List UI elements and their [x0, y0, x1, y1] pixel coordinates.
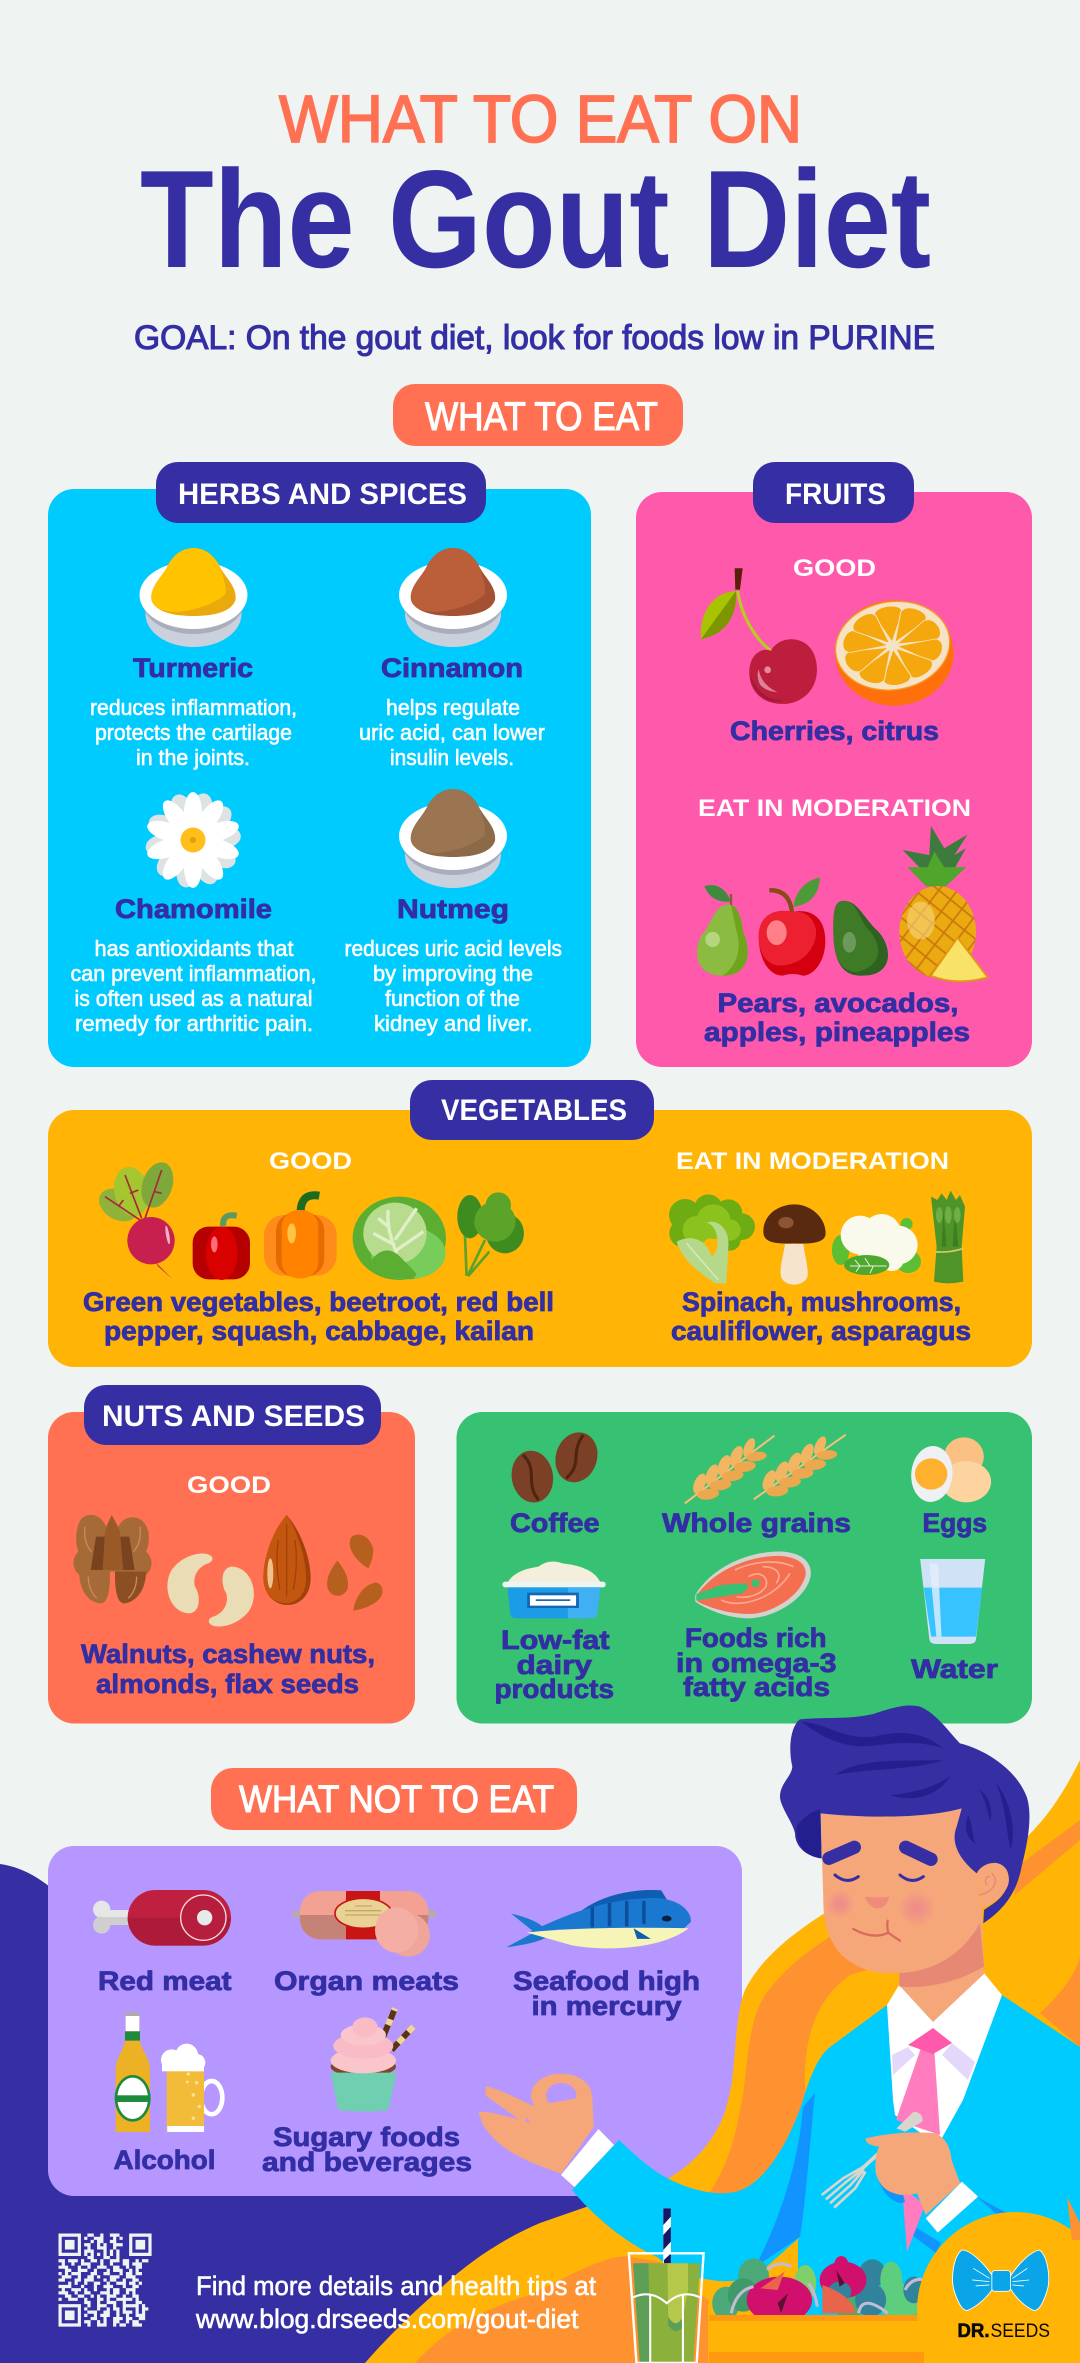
- icon: kailan: [457, 1192, 524, 1276]
- icon: fish: [506, 1890, 691, 1948]
- icon: turmeric bowl: [140, 548, 248, 647]
- icon: salad: [712, 2256, 922, 2315]
- label: organ meats: Organ meats: [274, 1966, 459, 1996]
- icon: chamomile flower: [144, 791, 242, 889]
- subheading: eat in moderation: EAT IN MODERATION: [698, 795, 971, 822]
- heading: what not to eat: WHAT NOT TO EAT: [239, 1779, 554, 1821]
- text: chamomile description: has antioxidants that: [94, 936, 294, 961]
- heading: what to eat: WHAT TO EAT: [425, 395, 658, 439]
- man: tie: [896, 2028, 952, 2252]
- label: foods rich in omega-3: Foods rich: [685, 1623, 826, 1653]
- label: seafood high in mercury: Seafood high: [513, 1966, 700, 1996]
- qr code: [58, 2235, 150, 2325]
- text: nutmeg description: kidney and liver.: [374, 1011, 532, 1036]
- label: seafood high in mercury: in mercury: [532, 1991, 682, 2021]
- man: collar shadow: [892, 2043, 975, 2080]
- heading: what to eat: [393, 384, 683, 446]
- title: [140, 82, 931, 297]
- icon: spinach: [669, 1194, 755, 1283]
- label: turmeric: Turmeric: [133, 653, 253, 683]
- panel: other foods: [456, 1412, 1032, 1724]
- icon: cashew nuts: [167, 1553, 254, 1627]
- icon: salmon steak: [695, 1552, 811, 1618]
- icon: green juice glass: [629, 2208, 704, 2363]
- man: fork and right hand: [822, 2112, 978, 2233]
- panel: what not to eat: [48, 1846, 742, 2196]
- label: water: Water: [911, 1654, 999, 1684]
- heading: nuts and seeds: NUTS AND SEEDS: [102, 1400, 365, 1433]
- label: foods rich in omega-3: fatty acids: [683, 1672, 830, 1702]
- footer text: www.blog.drseeds.com/gout-diet: [195, 2304, 579, 2334]
- text: nutmeg description: reduces uric acid levels: [344, 936, 562, 961]
- icon: cinnamon bowl: [399, 548, 507, 647]
- icon: red meat: [93, 1890, 231, 1946]
- icon: glass of water: [920, 1559, 985, 1644]
- icon: red bell pepper: [193, 1215, 250, 1280]
- label: coffee: Coffee: [510, 1508, 600, 1538]
- logo wordmark: SEEDS: [990, 2321, 1050, 2342]
- label: whole grains: Whole grains: [662, 1508, 851, 1538]
- subheading: vegetables in moderation: EAT IN MODERATION: [676, 1148, 949, 1175]
- icon: beetroot: [93, 1158, 179, 1279]
- icon: pineapple: [899, 826, 988, 981]
- heading: vegetables: VEGETABLES: [441, 1094, 627, 1127]
- man: suit: [572, 1995, 1080, 2320]
- icon: cauliflower: [832, 1214, 921, 1275]
- heading: what not to eat: [211, 1768, 577, 1830]
- background: orange blob bottom: [415, 2256, 708, 2363]
- footer text: Find more details and health tips at: [196, 2271, 596, 2301]
- label: chamomile: Chamomile: [115, 894, 272, 924]
- icon: asparagus: [931, 1191, 965, 1283]
- label: nuts list: almonds, flax seeds: [96, 1669, 359, 1699]
- label: sugary foods and beverages: Sugary foods: [273, 2122, 460, 2152]
- icon: eggs: [909, 1437, 991, 1504]
- man: left cuff: [561, 2129, 614, 2187]
- subheading: good vegetables: GOOD: [269, 1148, 352, 1175]
- title: The Gout Diet: [140, 142, 931, 297]
- label: low-fat dairy products: [494, 1625, 614, 1704]
- icon: citrus: [830, 594, 955, 706]
- subheading: good nuts: GOOD: [187, 1472, 271, 1499]
- text: cinnamon description: [359, 695, 545, 770]
- footer text: [195, 2271, 596, 2334]
- brand logo: dr seeds: [917, 2197, 1080, 2363]
- label: pears, avocados, apples, pineapples: Pears, avocados,: [718, 988, 958, 1018]
- text: turmeric description: protects the cartilage: [95, 720, 292, 745]
- goal statement: GOAL: On the gout diet, look for foods low in PURINE: [134, 319, 935, 357]
- icon: cherry: [701, 568, 817, 704]
- label: sugary foods and beverages: [262, 2122, 472, 2177]
- logo wordmark: DR.: [958, 2321, 990, 2342]
- background: navy corner shape: [0, 1864, 620, 2363]
- label: nuts list: [81, 1639, 375, 1699]
- label: pears, avocados, apples, pineapples: apples, pineapples: [704, 1017, 970, 1047]
- icon: nutmeg bowl: [399, 789, 507, 888]
- label: cherries, citrus: Cherries, citrus: [730, 716, 939, 746]
- label: nuts list: Walnuts, cashew nuts,: [81, 1639, 375, 1669]
- label: low-fat dairy products: dairy: [516, 1650, 592, 1680]
- icon: organ meats: [293, 1891, 436, 1957]
- icon: whole grains: [674, 1421, 856, 1516]
- heading: fruits: [753, 462, 914, 523]
- icon: cabbage: [353, 1197, 446, 1280]
- label: good vegetables list: [83, 1287, 554, 1346]
- label: moderation vegetables list: cauliflower, asparagus: [671, 1316, 971, 1346]
- icon: almond: [263, 1515, 311, 1605]
- text: chamomile description: remedy for arthritic pain.: [75, 1011, 313, 1036]
- icon: blue bow tie: [953, 2250, 1049, 2311]
- icon: low-fat dairy tub: [502, 1561, 606, 1618]
- icon: squash: [264, 1195, 337, 1278]
- text: nutmeg description: [344, 936, 562, 1036]
- man: shirt: [887, 1973, 1002, 2145]
- label: cinnamon: Cinnamon: [381, 653, 523, 683]
- icon: avocado: [833, 901, 888, 976]
- icon: beer bottle and mug: [116, 2013, 222, 2132]
- heading: fruits: FRUITS: [785, 478, 886, 511]
- label: eggs: Eggs: [922, 1508, 987, 1538]
- panel: herbs and spices: [48, 462, 591, 1067]
- text: cinnamon description: helps regulate: [386, 695, 520, 720]
- icon: apple: [759, 878, 825, 976]
- label: low-fat dairy products: products: [494, 1674, 614, 1704]
- text: chamomile description: is often used as a natural: [74, 986, 312, 1011]
- background: orange wave: [705, 1920, 900, 2200]
- label: red meat: Red meat: [98, 1966, 232, 1996]
- text: cinnamon description: insulin levels.: [390, 745, 514, 770]
- text: turmeric description: [90, 695, 297, 770]
- subheading: good: GOOD: [793, 555, 876, 582]
- label: foods rich in omega-3: in omega-3: [676, 1648, 836, 1678]
- label: low-fat dairy products: Low-fat: [501, 1625, 610, 1655]
- label: seafood high in mercury: [513, 1966, 700, 2021]
- label: nutmeg: Nutmeg: [397, 894, 509, 924]
- logo wordmark: [958, 2321, 1050, 2342]
- heading: nuts and seeds: [84, 1385, 381, 1445]
- panel: vegetables: [48, 1080, 1032, 1367]
- icon: flax seeds: [327, 1535, 383, 1611]
- text: chamomile description: can prevent inflammation,: [70, 961, 316, 986]
- label: pears, avocados, apples, pineapples: [704, 988, 970, 1047]
- label: moderation vegetables list: [671, 1287, 971, 1346]
- label: good vegetables list: pepper, squash, cabbage, kailan: [104, 1316, 534, 1346]
- panel: fruits: [636, 462, 1032, 1067]
- man: left hand ok gesture: [479, 2078, 594, 2174]
- heading: vegetables: [410, 1080, 654, 1140]
- background: yellow wave: [365, 1760, 1080, 2363]
- heading: herbs and spices: [156, 462, 486, 523]
- background: orange band right: [1015, 1820, 1080, 1895]
- icon: walnut: [73, 1515, 152, 1603]
- table: yellow tray: [709, 2315, 924, 2363]
- text: chamomile description: [70, 936, 316, 1036]
- panel: nuts and seeds: [48, 1385, 415, 1724]
- title: WHAT TO EAT ON: [279, 82, 802, 157]
- man: head and hair: [780, 1705, 1029, 2022]
- text: nutmeg description: function of the: [385, 986, 520, 1011]
- label: moderation vegetables list: Spinach, mushrooms,: [682, 1287, 961, 1317]
- background: orange shape right of shoulder: [1040, 1957, 1080, 2047]
- text: turmeric description: in the joints.: [136, 745, 250, 770]
- text: cinnamon description: uric acid, can lower: [359, 720, 545, 745]
- label: sugary foods and beverages: and beverages: [262, 2147, 472, 2177]
- illustration: man eating: [479, 1705, 1080, 2320]
- heading: herbs and spices: HERBS AND SPICES: [178, 478, 467, 511]
- icon: cupcake: [331, 2008, 413, 2112]
- icon: mushroom: [763, 1204, 826, 1285]
- label: good vegetables list: Green vegetables, beetroot, red bell: [83, 1287, 554, 1317]
- text: turmeric description: reduces inflammation,: [90, 695, 297, 720]
- icon: coffee beans: [508, 1428, 603, 1505]
- icon: pear: [697, 885, 748, 976]
- label: foods rich in omega-3: [676, 1623, 836, 1702]
- text: nutmeg description: by improving the: [373, 961, 533, 986]
- man: neck: [899, 1913, 984, 2022]
- label: alcohol: Alcohol: [114, 2145, 216, 2175]
- man: suit shadow: [755, 2093, 1005, 2267]
